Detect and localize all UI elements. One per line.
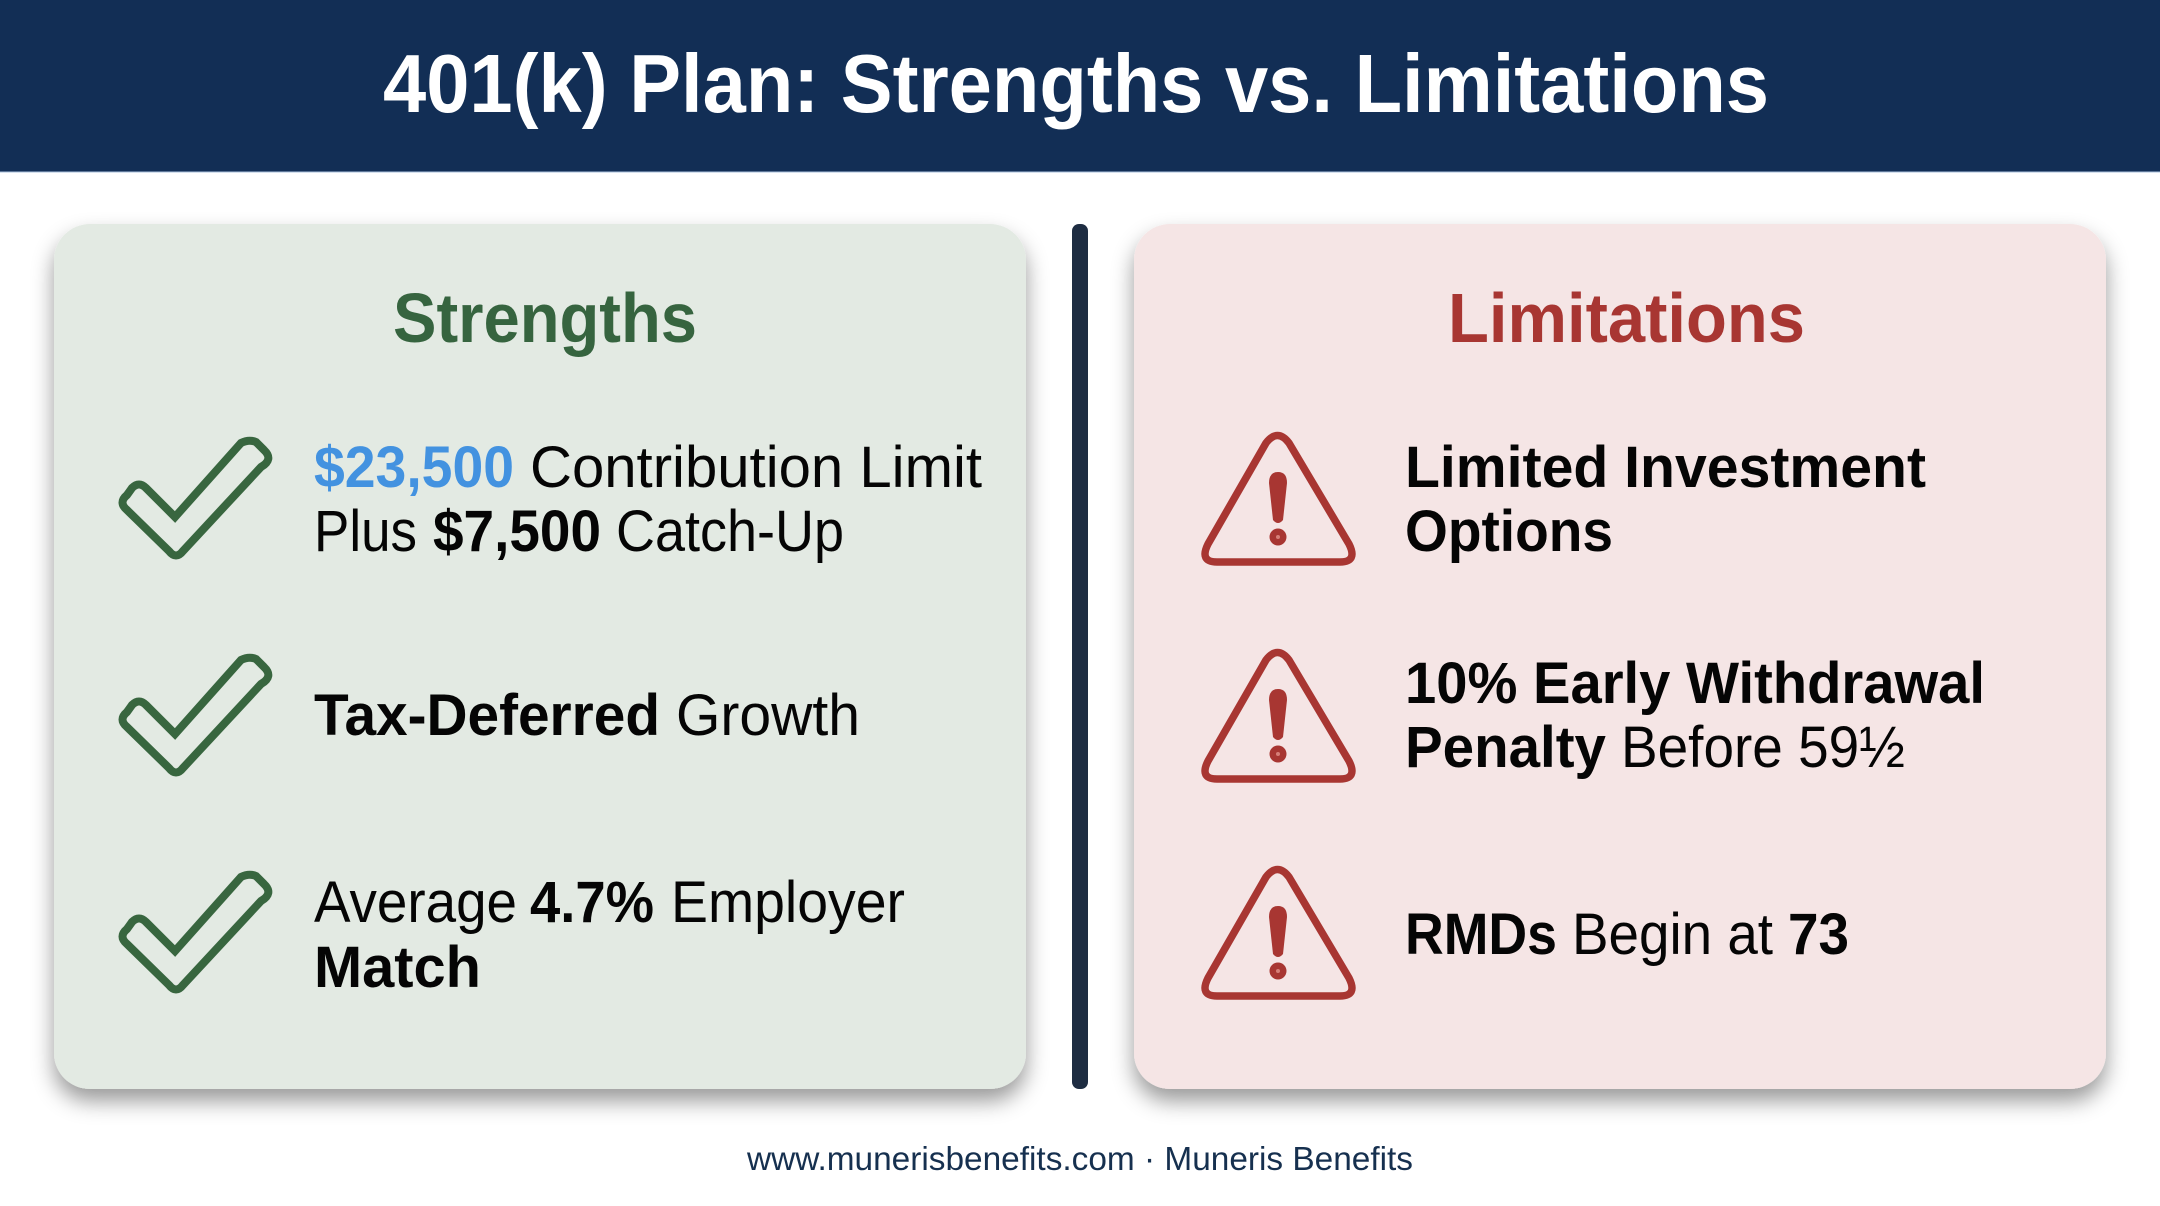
text: contribution limit: Plus xyxy=(314,499,417,564)
text: required minimum distributions: RMDs xyxy=(1405,902,1557,967)
panel: limitations xyxy=(1134,224,2106,1089)
text: early withdrawal penalty: Before 59½ xyxy=(1621,715,1905,780)
heading: limitations: Limitations xyxy=(1448,279,1805,357)
text: tax-deferred growth xyxy=(314,683,860,748)
item: required minimum distributions xyxy=(1205,870,1849,996)
center divider xyxy=(1072,224,1088,1089)
heading: strengths: Strengths xyxy=(393,279,697,357)
item: early withdrawal penalty xyxy=(1205,651,1985,780)
text: contribution limit: Contribution Limit xyxy=(530,435,982,500)
text: tax-deferred growth: Tax-Deferred xyxy=(314,683,660,748)
text: employer match: 4.7% xyxy=(530,870,654,935)
icon: warning triangle xyxy=(1205,652,1352,779)
item: employer match xyxy=(122,870,905,1000)
text: employer match: Employer xyxy=(671,870,905,935)
item: tax-deferred growth xyxy=(122,658,860,772)
text: limited investment options: Options xyxy=(1405,499,1613,564)
footer: www.munerisbenefits.com · Muneris Benefits xyxy=(746,1140,1413,1177)
text: early withdrawal penalty xyxy=(1405,651,1985,780)
text: contribution limit: $7,500 xyxy=(433,499,601,564)
icon: check mark xyxy=(122,441,268,556)
text: early withdrawal penalty: Penalty xyxy=(1405,715,1606,780)
text: employer match xyxy=(314,870,905,1000)
item: limited investment options xyxy=(1205,435,1926,564)
text: limited investment options: Limited Investment xyxy=(1405,435,1926,500)
panel: strengths xyxy=(54,224,1026,1089)
text: limited investment options xyxy=(1405,435,1926,564)
item: contribution limit xyxy=(122,435,982,564)
text: required minimum distributions: 73 xyxy=(1788,902,1849,967)
text: tax-deferred growth: Growth xyxy=(676,683,860,748)
header banner xyxy=(0,0,2160,172)
icon: check mark xyxy=(122,875,268,990)
icon: warning triangle xyxy=(1205,436,1352,562)
text: employer match: Match xyxy=(314,935,481,1000)
title: 401(k) Plan: Strengths vs. Limitations xyxy=(383,37,1769,130)
text: contribution limit: Catch-Up xyxy=(616,499,844,564)
text: required minimum distributions: Begin at xyxy=(1572,902,1773,967)
text: employer match: Average xyxy=(314,870,517,935)
icon: check mark xyxy=(122,658,268,772)
icon: warning triangle xyxy=(1205,870,1352,996)
text: early withdrawal penalty: 10% Early Withdrawal xyxy=(1405,651,1985,716)
text: contribution limit xyxy=(314,435,982,564)
text: required minimum distributions xyxy=(1405,902,1849,967)
text: contribution limit: $23,500 xyxy=(314,435,514,500)
